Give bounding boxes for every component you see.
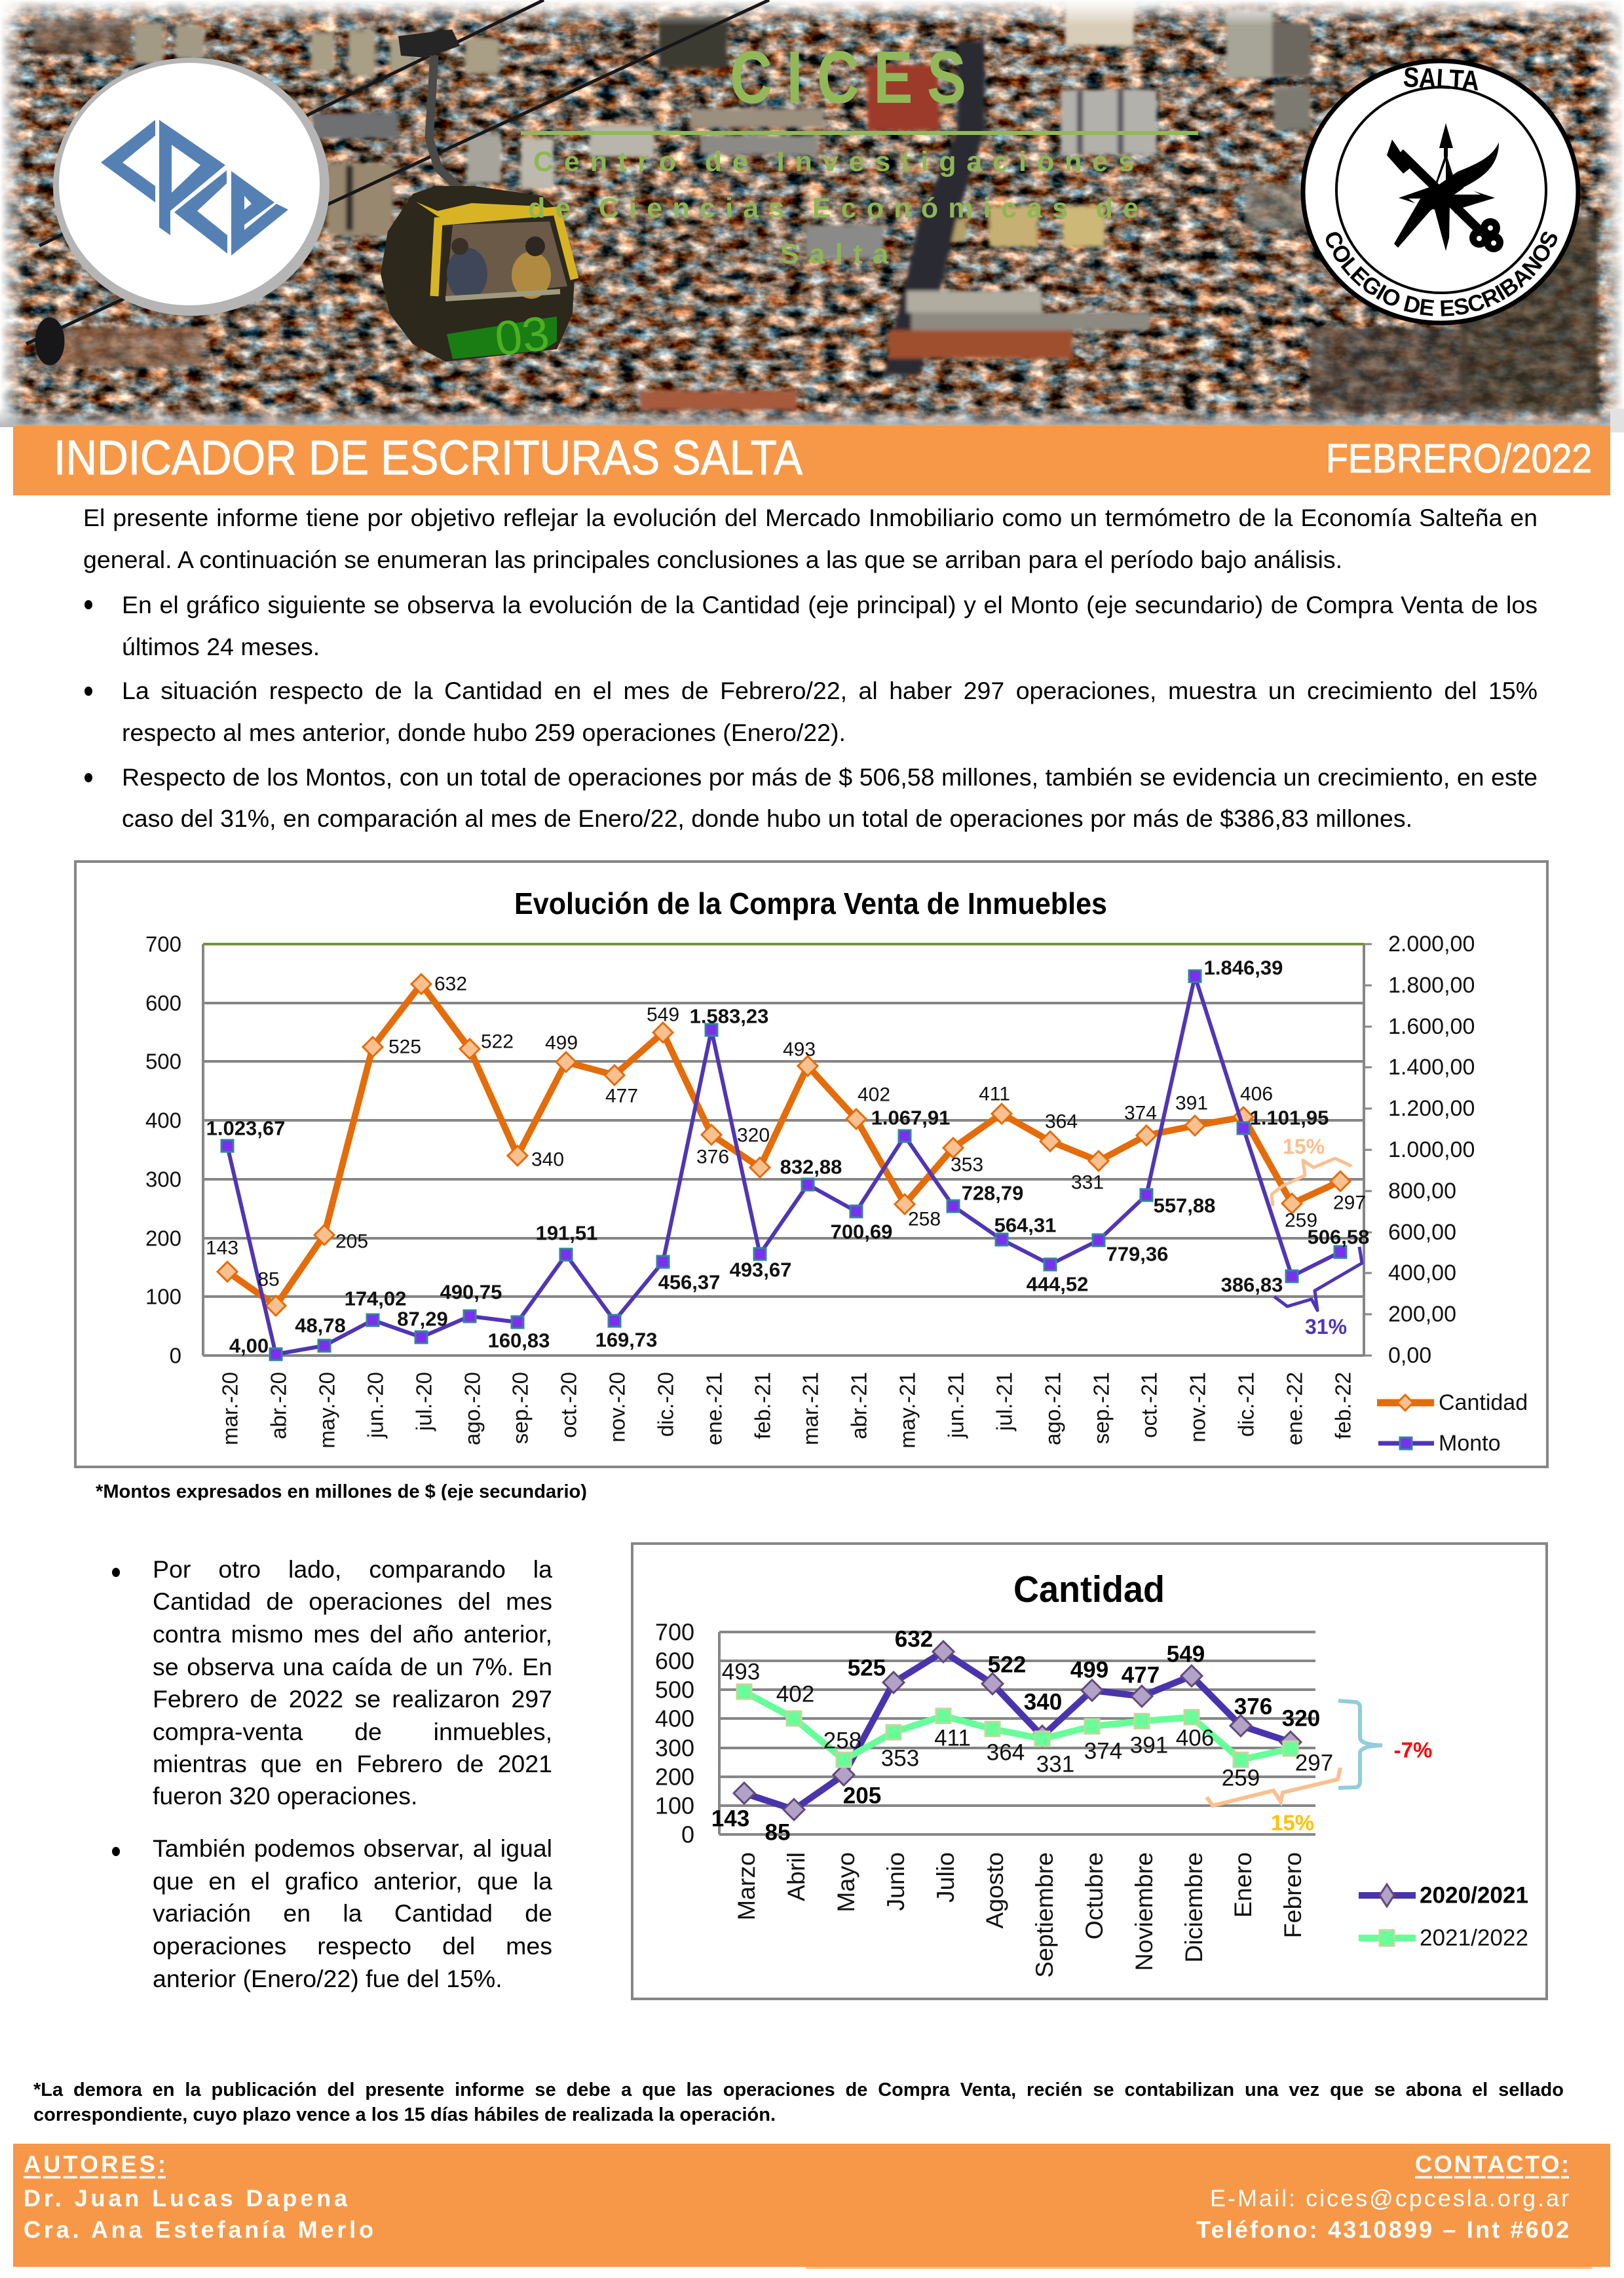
annotation: 15% brace	[1272, 1135, 1351, 1206]
axis labels	[655, 1618, 694, 1848]
gridlines and axes	[203, 944, 1372, 1356]
intro text block: Respecto de los Montos, con un total de operaciones por más de $ 506,58 millones, también se evidencia un crecimiento, en este	[122, 763, 1538, 791]
right axis labels	[1388, 932, 1475, 1368]
month axis labels: mar.-21	[798, 1372, 823, 1445]
series: 2020/2021	[734, 1641, 1301, 1820]
data labels: Cantidad: 411	[979, 1084, 1010, 1105]
right axis labels: 1.400,00	[1388, 1055, 1475, 1080]
right axis labels: 1.000,00	[1388, 1137, 1475, 1162]
data labels: Monto: 832,88	[780, 1156, 842, 1178]
data labels: 2021/2022: 411	[934, 1726, 971, 1751]
data labels: Monto: 700,69	[831, 1220, 892, 1243]
data labels: 2020/2021: 632	[895, 1626, 933, 1652]
subtitle: centro de investigaciones: Centro de Investigaciones	[533, 146, 1134, 178]
annotation: 15% brace	[1207, 1768, 1340, 1834]
text block: comparison bullets: compra-venta de inmuebles,	[153, 1718, 552, 1745]
data labels: Cantidad: 340	[531, 1149, 564, 1170]
axis labels: 500	[655, 1676, 694, 1703]
data labels: 2021/2022: 353	[881, 1745, 919, 1772]
text block: comparison bullets: anterior (Enero/22) fue del 15%.	[153, 1965, 502, 1992]
cable lines	[26, 0, 769, 364]
data labels: Cantidad: 320	[737, 1124, 770, 1147]
chart title: Cantidad	[1013, 1568, 1165, 1610]
data labels: Monto: 1.583,23	[690, 1005, 768, 1027]
data labels: Monto: 779,36	[1106, 1242, 1168, 1266]
data labels: 2020/2021: 525	[848, 1655, 886, 1681]
left axis labels	[145, 932, 181, 1368]
month labels: Noviembre	[1130, 1852, 1158, 1971]
data labels: Monto: 87,29	[397, 1308, 448, 1330]
data labels: 2021/2022: 406	[1176, 1726, 1214, 1751]
axis labels: 100	[655, 1793, 694, 1819]
text block: comparison bullets: También podemos observar, al igual	[153, 1834, 552, 1862]
logo: Colegio de Escribanos seal	[1301, 59, 1580, 325]
right axis labels: 400,00	[1388, 1261, 1456, 1285]
subtitle: centro de investigaciones	[528, 146, 1139, 270]
left axis labels: 400	[145, 1109, 181, 1132]
text block: comparison bullets: Cantidad de operaciones del mes	[153, 1587, 552, 1615]
data labels: Monto: 1.846,39	[1204, 957, 1283, 979]
data labels: Monto: 490,75	[440, 1280, 502, 1304]
authors: Dr. Juan Lucas Dapena	[24, 2184, 348, 2212]
series: Monto	[221, 970, 1346, 1360]
month labels: Agosto	[981, 1852, 1008, 1929]
data labels: Monto: 48,78	[295, 1314, 346, 1337]
data labels: Cantidad: 205	[335, 1230, 368, 1253]
data labels: 2020/2021: 320	[1282, 1706, 1320, 1731]
data labels: Cantidad: 391	[1175, 1093, 1208, 1114]
data labels: Monto: 564,31	[994, 1213, 1056, 1237]
month axis labels: abr.-20	[266, 1372, 291, 1439]
month axis labels: may.-21	[895, 1372, 920, 1449]
panel: evolution line chart	[74, 860, 1549, 1500]
data labels: Cantidad: 493	[783, 1039, 816, 1060]
month axis labels: oct.-20	[557, 1372, 580, 1438]
data labels: Cantidad: 85	[257, 1268, 280, 1291]
data labels: Cantidad: 499	[545, 1033, 578, 1054]
data labels: 2020/2021: 85	[765, 1820, 790, 1845]
contact: E-Mail: cices@cpcesla.org.ar	[1210, 2184, 1569, 2212]
data labels: 2020/2021	[711, 1626, 1320, 1845]
data labels: Monto: 160,83	[488, 1329, 550, 1352]
title bar	[13, 426, 1610, 495]
legend	[1359, 1883, 1528, 1951]
legend: 2021/2022	[1420, 1925, 1528, 1951]
month labels: Julio	[932, 1852, 959, 1903]
annotation: 15% brace: 15%	[1283, 1135, 1325, 1158]
intro text block: respecto al mes anterior, donde hubo 259 operaciones (Enero/22).	[122, 719, 846, 746]
annotation: 31% brace	[1274, 1247, 1362, 1338]
data labels: 2021/2022: 259	[1222, 1765, 1260, 1791]
data labels: Cantidad: 477	[605, 1085, 638, 1107]
data labels: Monto: 4,00	[229, 1334, 269, 1357]
month axis labels: ago.-20	[460, 1372, 485, 1445]
data labels: Cantidad: 364	[1045, 1111, 1078, 1132]
data labels: Cantidad: 522	[481, 1031, 514, 1052]
data labels: Monto: 444,52	[1027, 1272, 1088, 1296]
panel: Cantidad line chart	[631, 1542, 1548, 2000]
right axis labels: 2.000,00	[1388, 932, 1475, 957]
data labels: Monto: 728,79	[962, 1182, 1023, 1204]
authors	[24, 2150, 373, 2243]
data labels: 2021/2022: 374	[1084, 1739, 1122, 1764]
month axis labels: feb.-22	[1331, 1372, 1355, 1439]
contact: CONTACTO:	[1415, 2150, 1569, 2178]
month axis labels: sep.-21	[1089, 1372, 1114, 1444]
icon: cable car	[381, 29, 575, 366]
data labels: 2020/2021: 340	[1024, 1689, 1062, 1715]
data labels: Cantidad: 632	[434, 974, 467, 995]
data labels: Cantidad: 259	[1285, 1209, 1317, 1232]
logo: CPCE white disc	[53, 58, 330, 316]
axis labels: 300	[655, 1735, 694, 1761]
month labels: Enero	[1229, 1852, 1256, 1918]
right axis labels: 1.800,00	[1388, 973, 1475, 998]
data labels: 2020/2021: 522	[988, 1652, 1026, 1677]
data labels: Monto: 456,37	[658, 1271, 720, 1293]
data labels: Monto: 174,02	[345, 1287, 406, 1310]
data labels: 2020/2021: 477	[1122, 1663, 1160, 1688]
data labels: Cantidad	[206, 974, 1366, 1291]
text block: comparison bullets: contra mismo mes del año anterior,	[153, 1620, 552, 1648]
heading: date: FEBRERO/2022	[1326, 436, 1592, 482]
month axis labels: dic.-20	[654, 1372, 677, 1437]
month axis labels: may.-20	[314, 1372, 339, 1449]
contact: Teléfono: 4310899 – Int #602	[1196, 2216, 1569, 2243]
left axis labels: 700	[145, 932, 181, 957]
footnote	[33, 2079, 1564, 2125]
month labels: Febrero	[1279, 1852, 1306, 1938]
data labels: 2021/2022: 297	[1295, 1751, 1333, 1775]
month axis labels: ene.-21	[702, 1372, 726, 1445]
annotation: 15% brace: 15%	[1271, 1811, 1314, 1834]
header banner: city photo with logos and titles	[0, 0, 1624, 432]
data labels: Cantidad: 406	[1240, 1084, 1273, 1105]
edge fades	[0, 0, 1624, 26]
month labels: Mayo	[832, 1852, 859, 1912]
data labels: 2021/2022: 402	[776, 1681, 814, 1707]
month axis labels	[217, 1372, 1355, 1449]
axis labels: 200	[655, 1764, 694, 1790]
month axis labels: ene.-22	[1283, 1372, 1306, 1445]
right axis labels: 1.200,00	[1388, 1096, 1475, 1121]
data labels: 2021/2022	[722, 1659, 1333, 1791]
month axis labels: abr.-21	[846, 1372, 871, 1439]
data labels: 2021/2022: 391	[1130, 1732, 1168, 1758]
data labels: Monto: 191,51	[536, 1221, 597, 1245]
divider under CICES	[521, 131, 1198, 135]
intro text block: caso del 31%, en comparación al mes de Enero/22, donde hubo un total de operaciones por más de $386,83 millones.	[122, 805, 1412, 832]
left axis labels: 100	[145, 1284, 181, 1309]
month labels: Octubre	[1080, 1852, 1108, 1939]
month labels	[732, 1852, 1306, 1978]
data labels: Monto: 386,83	[1221, 1274, 1283, 1296]
contact	[1196, 2150, 1569, 2243]
data labels: Cantidad: 549	[647, 1004, 679, 1026]
authors: Cra. Ana Estefanía Merlo	[24, 2216, 373, 2243]
text block: comparison bullets: fueron 320 operaciones.	[153, 1782, 417, 1810]
data labels: Cantidad: 143	[206, 1237, 238, 1259]
footnote: correspondiente, cuyo plazo vence a los 15 días hábiles de realizada la operación.	[33, 2104, 776, 2125]
month labels: Junio	[882, 1852, 909, 1911]
data labels: Monto: 506,58	[1308, 1225, 1369, 1249]
right axis labels: 200,00	[1388, 1302, 1456, 1327]
month axis labels: jun.-20	[363, 1372, 388, 1439]
legend	[1377, 1390, 1528, 1456]
month labels: Abril	[782, 1852, 810, 1901]
legend: Monto	[1439, 1431, 1500, 1456]
month labels: Marzo	[732, 1852, 760, 1920]
title: CICES: CICES	[730, 36, 966, 119]
text block: comparison bullets: variación en la Cantidad de	[153, 1899, 552, 1927]
right axis labels: 600,00	[1388, 1220, 1456, 1245]
data labels: 2020/2021: 549	[1167, 1642, 1205, 1667]
data labels: 2020/2021: 143	[711, 1806, 749, 1832]
axis labels: 400	[655, 1705, 694, 1732]
data labels: 2021/2022: 493	[722, 1659, 760, 1685]
logo: Colegio de Escribanos seal: SALTA	[1403, 62, 1480, 97]
data labels: 2020/2021: 499	[1070, 1658, 1108, 1682]
right axis labels: 1.600,00	[1388, 1014, 1475, 1039]
right axis labels: 800,00	[1388, 1179, 1456, 1204]
data labels: Cantidad: 353	[951, 1154, 983, 1175]
left axis labels: 200	[145, 1226, 181, 1250]
data labels: Monto: 1.023,67	[206, 1116, 285, 1140]
month axis labels: nov.-21	[1186, 1372, 1209, 1443]
data labels: Monto: 557,88	[1154, 1194, 1215, 1217]
heading: indicador: INDICADOR DE ESCRITURAS SALTA	[54, 430, 803, 485]
data labels: 2021/2022: 258	[823, 1728, 861, 1753]
legend: Cantidad	[1439, 1390, 1528, 1415]
data labels: Cantidad: 258	[908, 1208, 941, 1230]
month axis labels: sep.-20	[508, 1372, 532, 1444]
data labels: Monto: 1.101,95	[1250, 1106, 1329, 1130]
intro text block: En el gráfico siguiente se observa la evolución de la Cantidad (eje principal) y el Monto (eje secundario) de Compra Venta de los	[122, 591, 1538, 618]
data labels: Monto	[206, 957, 1369, 1357]
axis labels: 700	[655, 1618, 694, 1646]
text block: comparison bullets: se observa una caída de un 7%. En	[153, 1653, 552, 1680]
data labels: Cantidad: 376	[696, 1147, 729, 1167]
subtitle: centro de investigaciones: de Ciencias Económicas de	[528, 193, 1139, 224]
data labels: Monto: 1.067,91	[871, 1106, 950, 1130]
annotation: -7% brace	[1338, 1701, 1432, 1788]
axis labels: 0	[681, 1821, 694, 1848]
icon: cable car: 03	[492, 305, 552, 366]
text block: comparison bullets: mientras que en Febrero de 2021	[153, 1750, 552, 1777]
month axis labels: ago.-21	[1040, 1372, 1065, 1445]
chart title: Evolución de la Compra Venta de Inmuebles	[514, 886, 1107, 921]
month axis labels: jun.-21	[943, 1372, 968, 1439]
month axis labels: jul.-20	[411, 1372, 436, 1432]
data labels: Cantidad: 374	[1124, 1102, 1157, 1124]
text block: comparison bullets: Febrero de 2022 se realizaron 297	[153, 1685, 552, 1713]
month axis labels: feb.-21	[751, 1372, 774, 1439]
intro text block: El presente informe tiene por objetivo reflejar la evolución del Mercado Inmobiliario como un termómetro de la Economía Salteña en	[83, 504, 1538, 531]
month axis labels: oct.-21	[1137, 1372, 1161, 1438]
annotation: -7% brace: -7%	[1394, 1737, 1432, 1762]
data labels: 2020/2021: 205	[843, 1783, 881, 1808]
logo: Colegio de Escribanos seal: COLEGIO DE ESCRIBANOS	[1326, 232, 1557, 316]
intro text block: últimos 24 meses.	[122, 633, 320, 660]
left axis labels: 600	[145, 991, 181, 1016]
data labels: 2021/2022: 364	[987, 1740, 1025, 1765]
month axis labels: mar.-20	[217, 1372, 242, 1445]
data labels: Monto: 493,67	[730, 1258, 791, 1281]
text block: comparison bullets: que en el grafico anterior, que la	[153, 1867, 552, 1895]
data labels: Cantidad: 525	[388, 1036, 421, 1057]
text block: comparison bullets: Por otro lado, comparando la	[153, 1555, 552, 1583]
month labels: Diciembre	[1180, 1852, 1207, 1963]
month labels: Septiembre	[1030, 1852, 1058, 1978]
data labels: Monto: 169,73	[595, 1329, 657, 1351]
axis labels: 600	[655, 1647, 694, 1675]
month axis labels: nov.-20	[605, 1372, 629, 1443]
footer bar	[13, 2144, 1610, 2269]
intro text block: general. A continuación se enumeran las principales conclusiones a las que se arriban para el período bajo análisis.	[83, 546, 1342, 573]
left axis labels: 300	[145, 1167, 181, 1191]
text block: comparison bullets	[112, 1555, 552, 1992]
left axis labels: 0	[170, 1343, 181, 1368]
data labels: Cantidad: 297	[1333, 1192, 1366, 1213]
series: Cantidad	[217, 974, 1350, 1316]
subtitle: centro de investigaciones: Salta	[780, 238, 889, 270]
left axis labels: 500	[145, 1050, 181, 1073]
data labels: 2021/2022: 331	[1036, 1752, 1074, 1777]
month axis labels: dic.-21	[1234, 1372, 1258, 1437]
intro text block	[83, 504, 1538, 832]
data labels: 2020/2021: 376	[1234, 1694, 1272, 1719]
gridlines	[719, 1632, 1315, 1834]
right axis labels: 0,00	[1388, 1343, 1431, 1368]
legend: 2020/2021	[1420, 1883, 1528, 1908]
annotation: 31% brace: 31%	[1305, 1315, 1347, 1338]
intro text block: La situación respecto de la Cantidad en el mes de Febrero/22, al haber 297 operaciones, muestra un crecimiento del 15%	[122, 677, 1538, 704]
authors: AUTORES:	[24, 2150, 166, 2178]
month axis labels: jul.-21	[992, 1372, 1017, 1432]
icon: key, sword and star	[1387, 123, 1503, 252]
city photo	[0, 0, 1624, 479]
footnote: *La demora en la publicación del presente informe se debe a que las operaciones de Compra Venta, recién se contabilizan una vez que se abona el sellado	[33, 2079, 1564, 2100]
text block: comparison bullets: operaciones respecto del mes	[153, 1932, 552, 1960]
series: 2021/2022	[737, 1684, 1298, 1767]
data labels: Cantidad: 331	[1071, 1171, 1104, 1194]
data labels: Cantidad: 402	[858, 1084, 890, 1106]
